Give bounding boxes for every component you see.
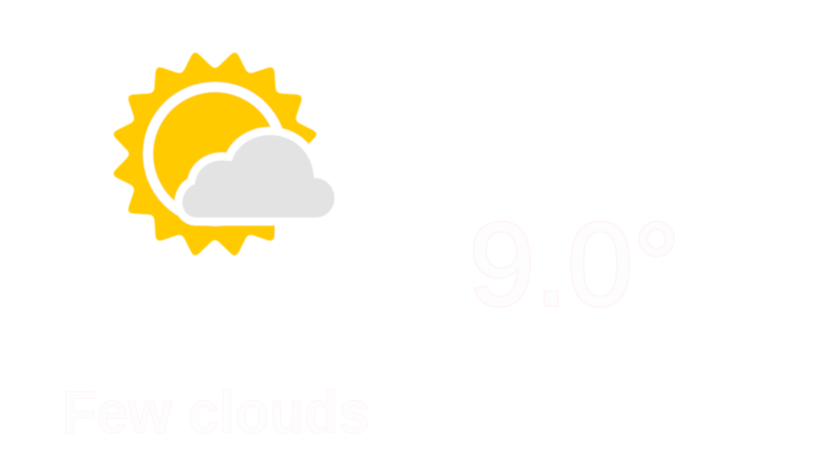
icon: sun rays (111, 50, 319, 258)
icon: cloud (182, 135, 334, 218)
icon: white sun ring (148, 87, 282, 221)
white band under cloud (190, 210, 280, 225)
white cut-out around cloud (275, 137, 345, 262)
temperature value: 9.0° (469, 199, 680, 331)
icon: sun behind cloud (111, 50, 345, 262)
condition label: Few clouds (62, 379, 370, 446)
